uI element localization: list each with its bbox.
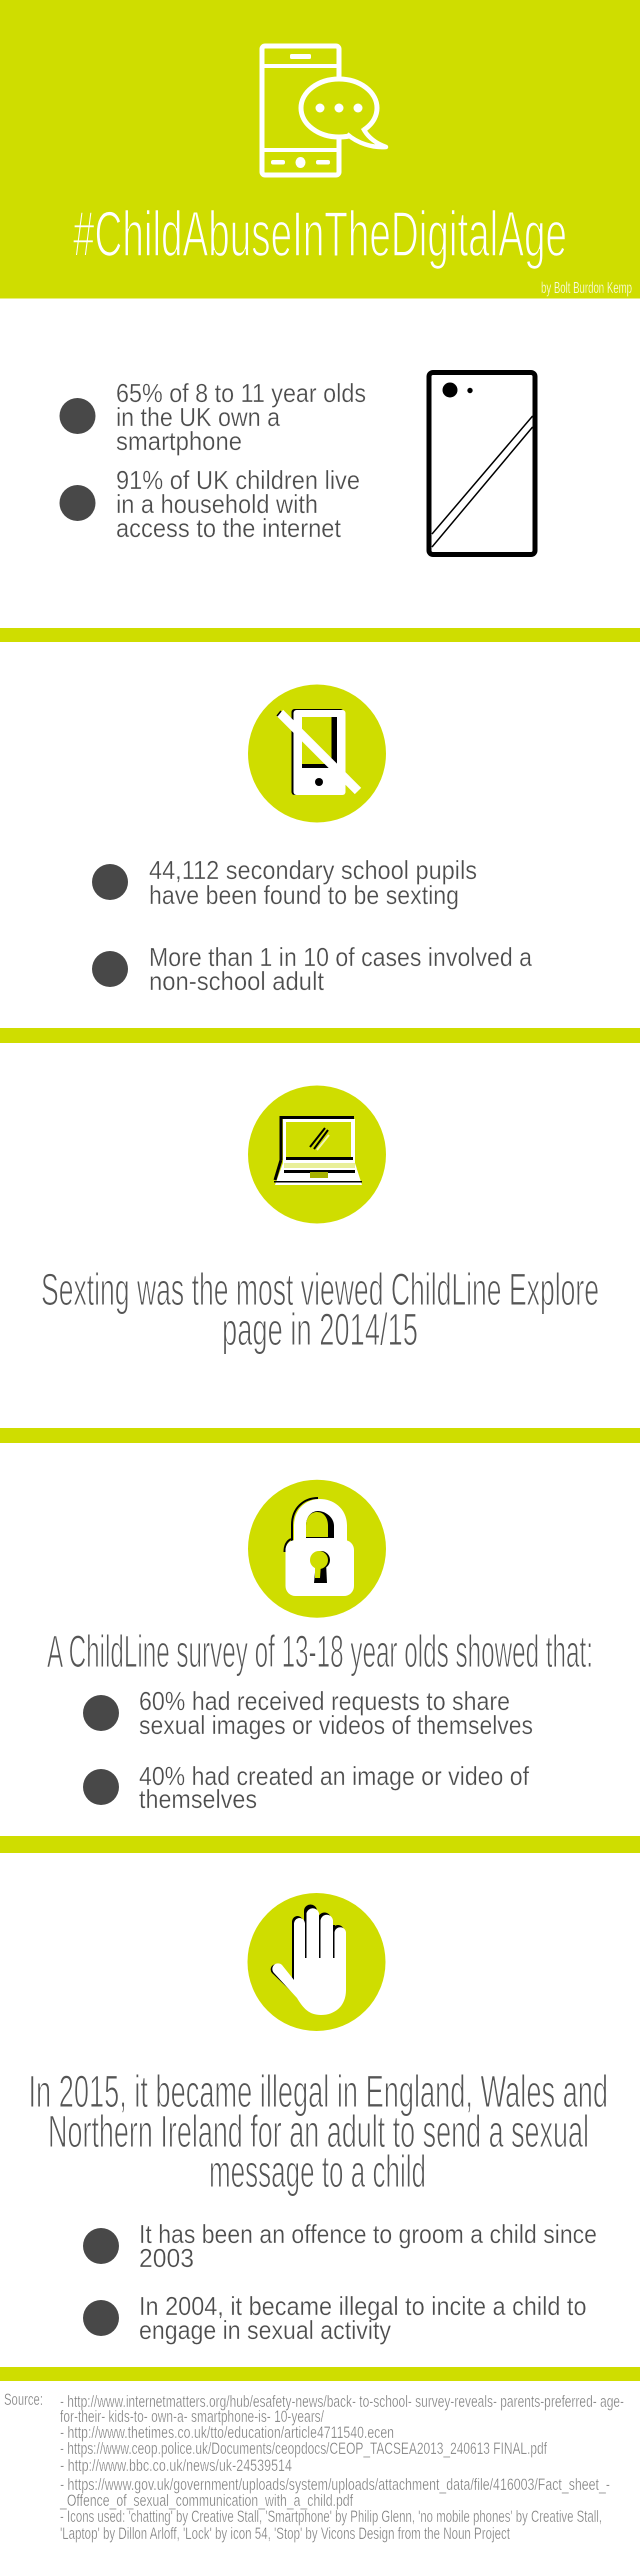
bullet: 40 percent: themselves: [139, 1784, 257, 1814]
bullet: 65 percent: 65% of 8 to 11 year olds: [116, 378, 366, 408]
bullet: 65 percent: [60, 378, 366, 456]
divider band 1: [0, 628, 640, 642]
panel: sexting pupils: [92, 684, 532, 996]
divider band 2: [0, 1028, 640, 1043]
icon: laptop: [248, 1086, 386, 1224]
bullet: 65 percent: in the UK own a: [116, 402, 280, 432]
bullet: 1 in 10 cases: More than 1 in 10 of cases involved a: [149, 942, 532, 972]
panel: sources: for-their- kids-to- own-a- smartphone-is- 10-years/: [60, 2407, 324, 2426]
bullet: 1 in 10 cases: [92, 942, 532, 996]
panel: smartphone ownership: [60, 372, 535, 554]
bullet: 44,112 pupils: have been found to be sexting: [149, 880, 459, 910]
icon: smartphone outline: [429, 372, 535, 554]
bullet: 60 percent: sexual images or videos of themselves: [139, 1710, 533, 1740]
bullet: incitement: [83, 2291, 586, 2345]
divider band 3: [0, 1428, 640, 1443]
bullet: 60 percent: 60% had received requests to share: [139, 1686, 510, 1716]
panel: sources: Source:: [4, 2390, 43, 2409]
bullet: 91 percent: access to the internet: [116, 513, 342, 543]
bullet: 91 percent: [60, 465, 360, 543]
icon: smartphone with chat bubble: [262, 46, 386, 175]
panel: sources: _Offence_of_sexual_communication_with_a_child.pdf: [59, 2491, 353, 2510]
bullet: incitement: In 2004, it became illegal to incite a child to: [139, 2291, 586, 2321]
bullet: grooming offence: [83, 2219, 597, 2273]
bullet: 60 percent: [83, 1686, 533, 1740]
panel: ChildLine Explore: [41, 1086, 599, 1355]
bullet: 44,112 pupils: [92, 855, 477, 910]
bullet: incitement: engage in sexual activity: [139, 2315, 391, 2345]
icon: padlock: [248, 1480, 386, 1618]
heading: 2015 law: [28, 2066, 608, 2197]
icon: no mobile phones: [248, 684, 386, 822]
divider band 4: [0, 1836, 640, 1853]
bullet: 91 percent: 91% of UK children live: [116, 465, 360, 495]
bullet: 91 percent: in a household with: [116, 489, 318, 519]
panel: header: [0, 0, 640, 298]
bullet: 44,112 pupils: 44,112 secondary school pupils: [149, 855, 477, 885]
panel: sources: [4, 2390, 624, 2543]
panel: sources: - http://www.bbc.co.uk/news/uk-24539514: [60, 2456, 292, 2475]
panel: the law: [28, 1893, 608, 2345]
panel: sources: - http://www.thetimes.co.uk/tto/education/article4711540.ecen: [60, 2423, 394, 2442]
panel: ChildLine survey: [47, 1480, 593, 1814]
heading: 2015 law: message to a child: [209, 2146, 426, 2197]
heading: most viewed page: page in 2014/15: [222, 1304, 418, 1355]
bullet: 40 percent: 40% had created an image or video of: [139, 1761, 530, 1791]
divider band 5: [0, 2367, 640, 2381]
bullet: 65 percent: smartphone: [116, 426, 242, 456]
bullet: 1 in 10 cases: non-school adult: [149, 966, 325, 996]
bullet: 40 percent: [83, 1761, 530, 1814]
heading: most viewed page: [41, 1264, 599, 1355]
icon: stop hand: [248, 1893, 386, 2031]
bullet: grooming offence: 2003: [139, 2243, 194, 2273]
